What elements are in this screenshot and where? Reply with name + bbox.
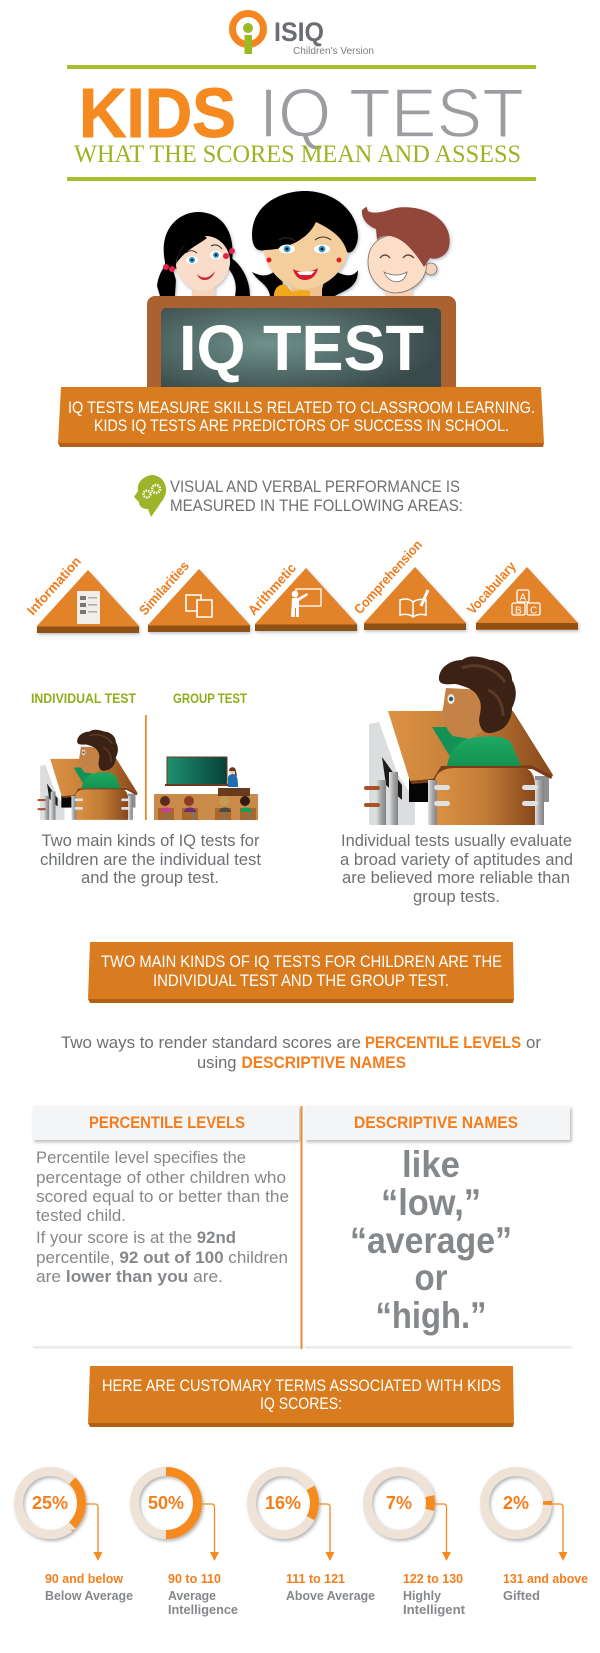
label: Highly <box>403 1588 442 1603</box>
girl with pigtails <box>157 212 250 296</box>
donut: 25 percent <box>5 1458 133 1603</box>
descriptive names list: “low,” <box>381 1182 481 1223</box>
arrow <box>319 1504 334 1561</box>
label: 90 and below <box>45 1571 124 1586</box>
text: individual tests <box>340 832 573 906</box>
descriptive names list: “average” <box>350 1220 512 1261</box>
icon: head with gears <box>134 475 166 517</box>
icon: logo ring <box>232 14 264 54</box>
donut: 7 percent <box>361 1465 466 1617</box>
banner: customary terms <box>88 1366 514 1427</box>
label: 111 to 121 <box>286 1571 345 1586</box>
boy <box>362 207 450 296</box>
label <box>503 1571 588 1603</box>
icon: alphabet blocks: A <box>520 592 526 604</box>
percentile description: tested child. <box>36 1207 126 1225</box>
text: standard scores: or <box>526 1034 542 1052</box>
chalkboard text: IQ TEST <box>179 312 424 384</box>
label: Above Average <box>286 1588 375 1603</box>
label: Below Average <box>45 1588 133 1603</box>
triangle: comprehension <box>351 537 466 630</box>
panel: score comparison table <box>33 1106 570 1349</box>
subtitle: WHAT THE SCORES MEAN AND ASSESS <box>74 141 521 168</box>
illustration: large student at desk <box>364 657 553 825</box>
text: standard scores: using <box>197 1054 236 1072</box>
text: standard scores: PERCENTILE LEVELS <box>365 1034 521 1052</box>
title: KIDS: KIDS <box>79 74 236 152</box>
triangle: information: Information <box>24 554 84 618</box>
label: Average <box>168 1588 216 1603</box>
triangle: comprehension: Comprehension <box>351 537 425 617</box>
icon: checklist <box>77 591 100 624</box>
section heading: performance areas: VISUAL AND VERBAL PERFORMANCE IS <box>170 478 460 496</box>
icon: alphabet blocks: B <box>515 606 522 616</box>
banner: two main kinds: INDIVIDUAL TEST AND THE GROUP TEST. <box>153 972 449 990</box>
text: two main kinds: children are the individual test <box>40 851 261 869</box>
chalkboard <box>147 296 456 398</box>
triangle: vocabulary <box>464 558 578 630</box>
banner text: IQ TESTS MEASURE SKILLS RELATED TO CLASSROOM LEARNING. <box>68 399 535 417</box>
floor and desks <box>154 788 258 820</box>
banner: customary terms: IQ SCORES: <box>260 1395 342 1413</box>
title block <box>67 65 536 181</box>
descriptive names list: “high.” <box>376 1295 486 1336</box>
donut: 7 percent: 7% <box>386 1493 412 1513</box>
donut: 16 percent: 16% <box>265 1493 301 1513</box>
donut: 2 percent: 2% <box>503 1493 529 1513</box>
text: individual tests: are believed more reliable than <box>342 869 570 887</box>
text: two main kinds: Two main kinds of IQ tests for <box>42 832 260 850</box>
donut: 50 percent: 50% <box>148 1493 184 1513</box>
text: individual tests: a broad variety of aptitudes and <box>340 851 573 869</box>
descriptive names list: or <box>414 1257 448 1298</box>
icon: alphabet blocks <box>512 590 540 616</box>
text: standard scores <box>61 1034 542 1072</box>
percentile description: percentile, 92 out of 100 children <box>36 1249 288 1267</box>
table header: descriptive names: DESCRIPTIVE NAMES <box>354 1114 518 1132</box>
triangle: arithmetic <box>245 560 357 631</box>
percentile description: percentage of other children who <box>36 1169 286 1187</box>
heading: group test: GROUP TEST <box>173 691 248 706</box>
label: 122 to 130 <box>403 1571 463 1586</box>
section heading: performance areas <box>134 475 463 517</box>
percentile description: Percentile level specifies the <box>36 1149 246 1167</box>
arrow <box>435 1504 451 1561</box>
illustration: small student at desk <box>37 730 138 820</box>
text: two main kinds: and the group test. <box>81 869 219 887</box>
table header: percentile levels <box>33 1106 299 1140</box>
percentile description: scored equal to or better than the <box>36 1188 289 1206</box>
banner: two main kinds: TWO MAIN KINDS OF IQ TESTS FOR CHILDREN ARE THE <box>101 953 502 971</box>
triangle: arithmetic: Arithmetic <box>245 560 299 618</box>
banner: customary terms: HERE ARE CUSTOMARY TERMS ASSOCIATED WITH KIDS <box>102 1377 501 1395</box>
label <box>403 1571 466 1617</box>
text: individual tests: group tests. <box>413 888 500 906</box>
triangle: similarities: Similarities <box>136 558 192 618</box>
label: 131 and above <box>503 1571 588 1586</box>
triangle: vocabulary: Vocabulary <box>464 558 519 617</box>
illustration: three children <box>157 191 450 296</box>
table header: descriptive names <box>305 1106 570 1140</box>
section heading: performance areas: MEASURED IN THE FOLLOWING AREAS: <box>170 497 463 515</box>
icon: alphabet blocks: C <box>530 606 537 616</box>
teacher <box>228 767 238 787</box>
label: Intelligent <box>403 1602 466 1617</box>
logo wordmark: ISIQ <box>274 17 324 47</box>
text: individual tests: Individual tests usually evaluate <box>341 832 572 850</box>
donut: 25 percent: 25% <box>32 1493 68 1513</box>
illustration: group classroom <box>154 757 258 820</box>
label <box>286 1571 375 1603</box>
arrow <box>85 1504 102 1561</box>
label <box>45 1571 133 1603</box>
label <box>168 1571 238 1617</box>
banner: intro: KIDS IQ TESTS ARE PREDICTORS OF SUCCESS IN SCHOOL. <box>94 417 509 435</box>
percentile description <box>36 1149 289 1286</box>
banner: two main kinds <box>88 942 514 1003</box>
descriptive names list: like <box>402 1144 460 1185</box>
table header: percentile levels: PERCENTILE LEVELS <box>89 1114 245 1132</box>
triangle: information <box>24 554 139 633</box>
descriptive names list <box>350 1144 512 1336</box>
banner: intro <box>58 387 544 447</box>
title: IQ TEST: IQ TEST <box>259 74 524 152</box>
percentile description: If your score is at the 92nd <box>36 1229 236 1247</box>
triangle: similarities <box>136 558 250 632</box>
logo <box>232 14 374 57</box>
mother <box>252 191 358 296</box>
donut: 2 percent <box>483 1470 588 1603</box>
arrow <box>552 1504 568 1561</box>
icon: book and pencil <box>400 590 428 617</box>
label: Gifted <box>503 1588 540 1603</box>
text: two main kinds <box>40 832 261 887</box>
label: 90 to 110 <box>168 1571 221 1586</box>
icon: copies <box>186 595 212 617</box>
icon: teacher at board <box>291 589 321 617</box>
percentile description: are lower than you are. <box>36 1268 223 1286</box>
logo subtitle: Children's Version <box>293 45 374 57</box>
donut: 50 percent <box>134 1472 238 1617</box>
donut: 16 percent <box>240 1460 375 1603</box>
arrow <box>202 1504 219 1561</box>
label: Intelligence <box>168 1602 238 1617</box>
heading: individual test: INDIVIDUAL TEST <box>31 691 137 706</box>
text: standard scores: DESCRIPTIVE NAMES <box>242 1054 406 1072</box>
text: standard scores: Two ways to render standard scores are <box>61 1034 361 1052</box>
